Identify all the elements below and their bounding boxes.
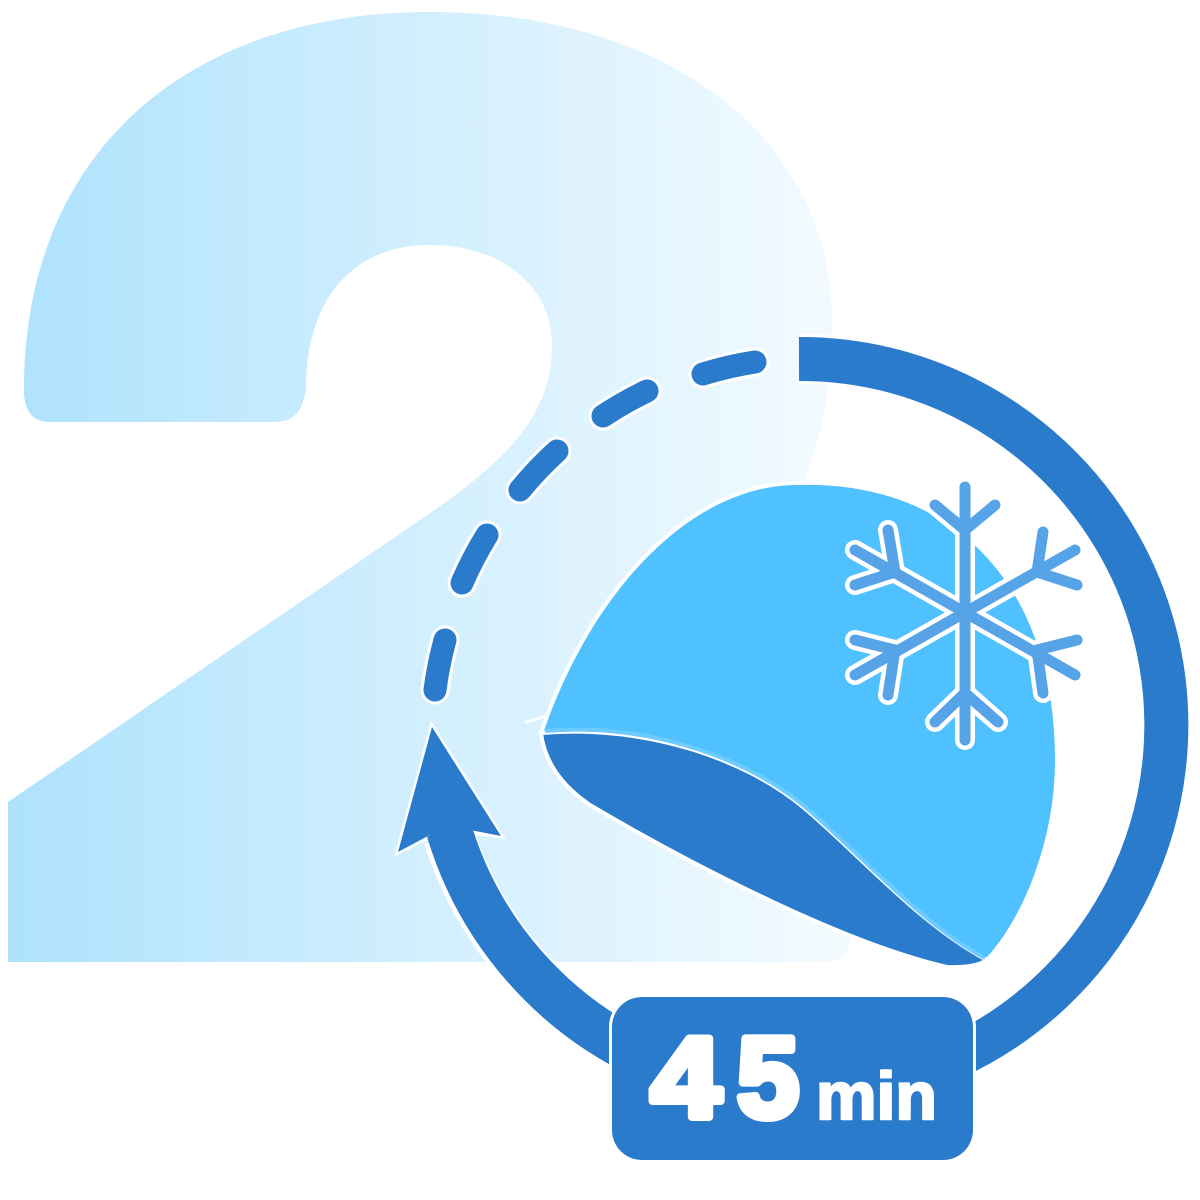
arrowhead — [398, 727, 501, 852]
time badge: 5 — [737, 1015, 799, 1142]
solid arc — [799, 359, 1166, 1059]
icon: snowflake — [855, 487, 1077, 740]
cap brim — [541, 732, 987, 967]
time badge — [609, 994, 976, 1163]
time badge: 4 — [651, 1015, 721, 1142]
small white tick at cap edge — [526, 716, 546, 722]
lower solid arc — [449, 830, 650, 1059]
circular timer arrow — [398, 359, 1166, 1059]
dashed arc — [435, 362, 755, 690]
time badge: min — [816, 1059, 937, 1134]
white halo under timer — [398, 359, 1166, 1059]
brim top edge highlight — [545, 730, 985, 958]
cooling cap icon — [526, 483, 1077, 967]
cap body — [541, 483, 1057, 960]
big numeral 2 background — [8, 12, 850, 962]
